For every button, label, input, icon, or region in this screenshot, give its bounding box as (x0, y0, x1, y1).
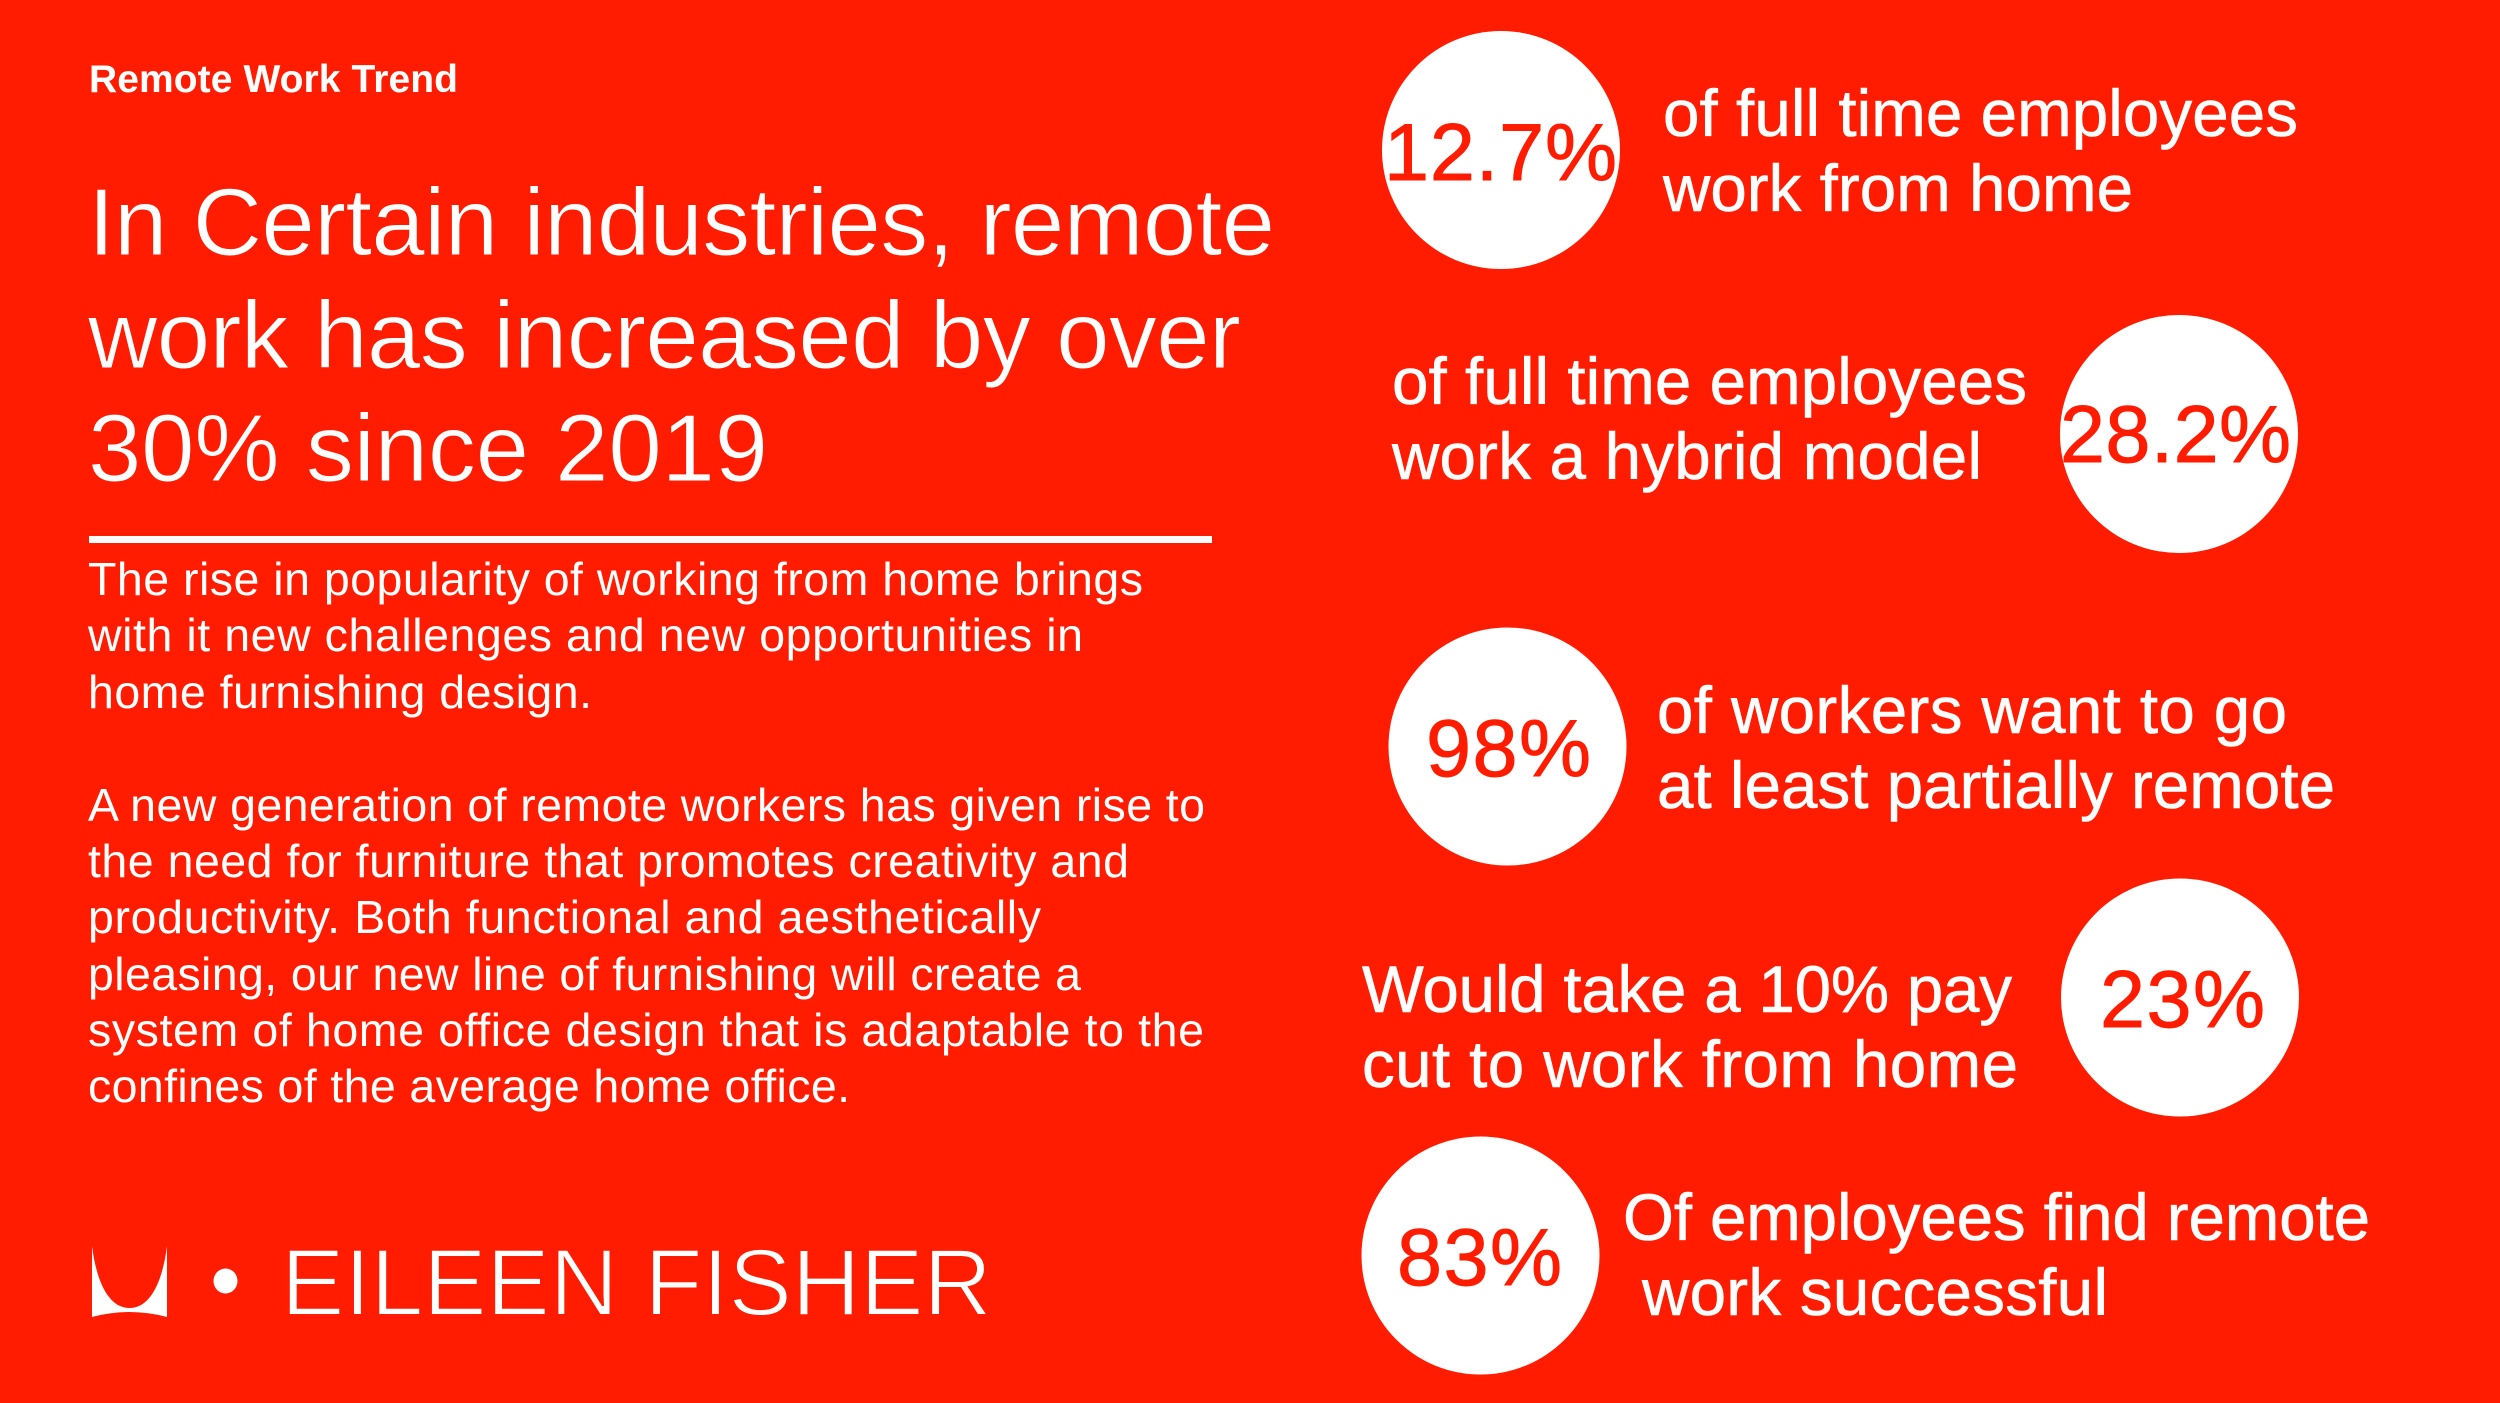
icon: logo dot (214, 1268, 238, 1294)
stat: 98%: of workers want to go (1657, 674, 2287, 747)
intro paragraph: The rise in popularity of working from home brings (88, 553, 1143, 605)
stat: 23%: cut to work from home (1362, 1028, 2018, 1101)
second paragraph: A new generation of remote workers has given rise to (88, 779, 1205, 831)
stat: 83%: Of employees find remote (1623, 1181, 2370, 1254)
stat: 98%: 98% (1426, 704, 1591, 794)
stat: 12.7% (1382, 31, 2298, 269)
headline: In Certain industries, remote (88, 169, 1275, 276)
stat: 28.2% (1391, 315, 2298, 553)
icon: logo mark (92, 1246, 167, 1317)
stat: 83%: work successful (1641, 1256, 2108, 1329)
stat: 83%: 83% (1397, 1213, 1562, 1303)
stat: 98% (1388, 628, 2335, 866)
stat: 23% (1362, 878, 2299, 1116)
second paragraph: the need for furniture that promotes creativity and (88, 835, 1129, 887)
headline: work has increased by over (87, 282, 1241, 389)
intro paragraph: with it new challenges and new opportunities in (87, 609, 1083, 661)
stat: 98%: at least partially remote (1657, 749, 2335, 822)
intro paragraph (87, 553, 1143, 718)
second paragraph: confines of the average home office. (88, 1060, 850, 1112)
second paragraph: productivity. Both functional and aesthetically (88, 891, 1042, 943)
wordmark: EILEEN FISHER (281, 1230, 992, 1336)
headline: 30% since 2019 (88, 395, 768, 502)
stat: 28.2%: of full time employees (1392, 345, 2027, 418)
headline rule (89, 536, 1212, 543)
stat: 28.2%: work a hybrid model (1391, 420, 1982, 493)
headline (87, 169, 1275, 502)
stat: 12.7%: work from home (1662, 152, 2133, 225)
stat: 12.7%: 12.7% (1384, 108, 1617, 198)
second paragraph: system of home office design that is adaptable to the (88, 1004, 1204, 1056)
stat: 83% (1362, 1136, 2370, 1374)
stat: 23%: 23% (2100, 955, 2265, 1045)
stat: 23%: Would take a 10% pay (1362, 953, 2012, 1026)
brand logo (92, 1230, 992, 1336)
eyebrow label: Remote Work Trend (89, 58, 458, 101)
second paragraph: pleasing, our new line of furnishing will create a (88, 948, 1081, 1000)
stat: 28.2%: 28.2% (2060, 390, 2291, 480)
stat: 12.7%: of full time employees (1663, 77, 2298, 150)
second paragraph (88, 779, 1205, 1112)
intro paragraph: home furnishing design. (88, 666, 592, 718)
